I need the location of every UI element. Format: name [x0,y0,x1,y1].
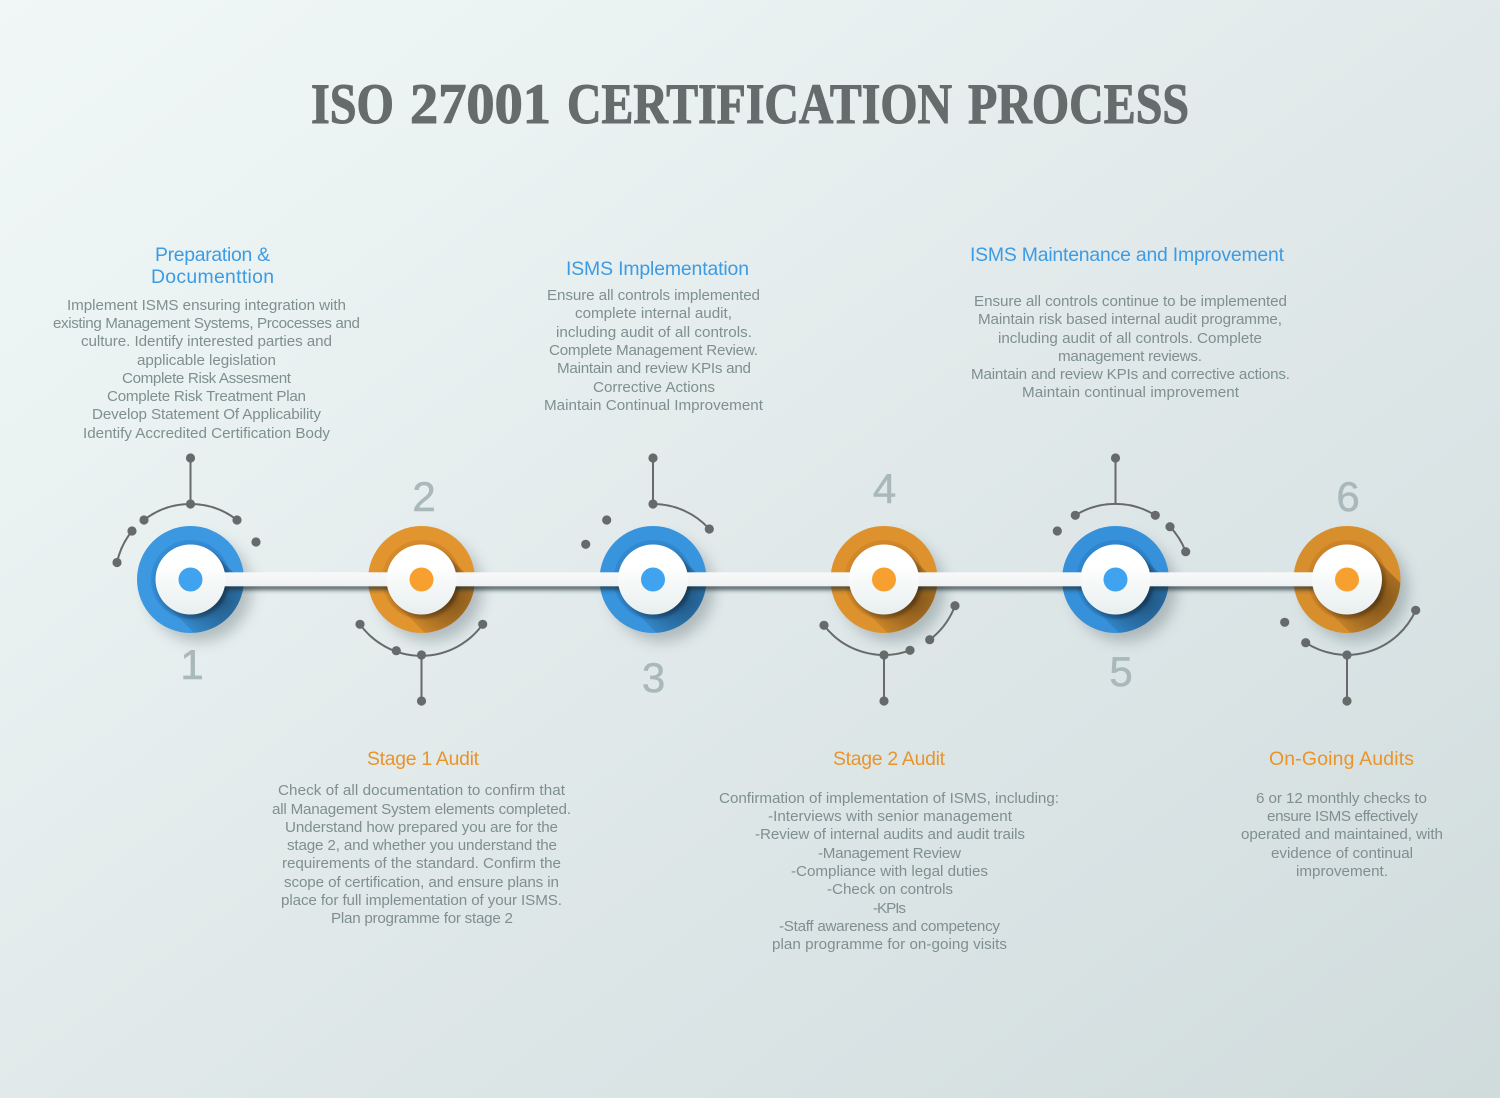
hub: step 6 [1312,544,1382,614]
text block: stage 2 audit: -Compliance with legal duties [791,863,988,880]
text block: stage 2 audit [719,790,1059,953]
text block: preparation [53,297,360,442]
panel: stage 2 audit [719,748,1059,953]
text block: ISMS implementation: Complete Management Review. [549,342,758,359]
text block: stage 1 audit [272,782,571,927]
connector: step 4 [819,601,960,706]
text block: stage 2 audit: -Staff awareness and competency [779,918,1000,935]
text block: preparation: Develop Statement Of Applicability [92,406,321,423]
text block: on-going audits [1241,790,1443,880]
text block: ISMS maintenance: Maintain and review KPIs and corrective actions. [971,366,1290,383]
connector: step 6 [1280,606,1420,706]
hub: step 4 [849,544,919,614]
text block: stage 2 audit: Confirmation of implementation of ISMS, including: [719,790,1059,807]
text block: ISMS implementation: Maintain and review KPIs and [557,360,751,377]
text block: ISMS implementation: Maintain Continual Improvement [544,397,764,414]
title: CERTIFICATION [567,73,952,136]
connector: step 1 [112,453,261,567]
heading: preparation: Preparation & [155,244,270,266]
title: 27001 [410,73,551,136]
number 3: 3 [642,654,665,701]
text block: preparation: Complete Risk Treatment Plan [107,388,306,405]
text block: preparation: Implement ISMS ensuring integration with [67,297,346,314]
text block: stage 1 audit: place for full implementation of your ISMS. [281,892,562,909]
number 6: 6 [1336,473,1360,520]
text block: stage 2 audit: -Check on controls [827,881,953,898]
text block: stage 2 audit: -KPIs [873,900,906,917]
panel: ISMS implementation [544,258,764,414]
number 1: 1 [180,641,204,688]
text block: stage 1 audit: scope of certification, and ensure plans in [284,874,559,891]
text block: on-going audits: evidence of continual [1271,845,1413,862]
text block: ISMS implementation: Corrective Actions [593,379,715,396]
connector: step 5 [1053,453,1190,556]
text block: ISMS maintenance [971,293,1290,401]
panel: ISMS maintenance and improvement [970,244,1290,401]
ring: step 3 [600,526,738,664]
text block: ISMS maintenance: Maintain continual improvement [1022,384,1240,401]
ring: step 1 [137,526,276,664]
text block: ISMS implementation [544,287,764,414]
text block: stage 2 audit: -Interviews with senior management [768,808,1013,825]
text block: on-going audits: operated and maintained, with [1241,826,1443,843]
text block: preparation: applicable legislation [137,352,276,369]
title: PROCESS [968,73,1189,136]
text block: ISMS implementation: Ensure all controls implemented [547,287,760,304]
number 2: 2 [412,473,436,520]
text block: preparation: culture. Identify interested parties and [81,333,332,350]
text block: preparation: Complete Risk Assesment [122,370,292,387]
text block: preparation: existing Management Systems, Prcocesses and [53,315,360,332]
text block: stage 2 audit: -Management Review [818,845,961,862]
hub: step 5 [1080,544,1150,614]
text block: stage 1 audit: stage 2, and whether you understand the [287,837,557,854]
heading: preparation [151,244,274,288]
text block: stage 2 audit: plan programme for on-going visits [772,936,1007,953]
panel: stage 1 audit [272,748,571,927]
text block: stage 1 audit: Understand how prepared you are for the [285,819,558,836]
panel: on-going audits [1241,748,1443,880]
text block: on-going audits: improvement. [1296,863,1388,880]
panel: preparation and documentation [53,244,360,442]
number 5: 5 [1109,648,1133,695]
heading: preparation: Documenttion [151,266,274,288]
text block: stage 1 audit: requirements of the standard. Confirm the [282,855,561,872]
connecting bar [195,572,1350,590]
text block: on-going audits: ensure ISMS effectively [1267,808,1418,825]
text block: stage 1 audit: all Management System elements completed. [272,801,571,818]
text block: ISMS implementation: complete internal audit, [575,305,732,322]
ring: step 2 [368,526,506,664]
text block: ISMS maintenance: including audit of all controls. Complete [998,330,1262,347]
text block: on-going audits: 6 or 12 monthly checks to [1256,790,1427,807]
text block: ISMS maintenance: Ensure all controls continue to be implemented [974,293,1287,310]
text block: stage 1 audit: Check of all documentation to confirm that [278,782,566,799]
heading: stage 2 audit: Stage 2 Audit [833,748,946,770]
text block: stage 2 audit: -Review of internal audits and audit trails [755,826,1025,843]
number 4: 4 [873,465,896,512]
ring: step 4 [830,526,969,664]
ring: step 6 [1294,526,1432,664]
timeline [137,526,1432,664]
text block: ISMS maintenance: Maintain risk based internal audit programme, [978,311,1282,328]
heading: ISMS implementation: ISMS Implementation [566,258,749,280]
hub: step 2 [386,544,456,614]
title [311,73,1189,136]
text block: ISMS maintenance: management reviews. [1058,348,1202,365]
heading: on-going audits: On-Going Audits [1269,748,1414,770]
connector: step 3 [581,453,714,549]
connector: step 2 [355,620,487,706]
hub: step 3 [618,544,688,614]
heading: ISMS maintenance: ISMS Maintenance and Improvement [970,244,1285,266]
heading: stage 1 audit: Stage 1 Audit [367,748,480,770]
title: ISO [311,73,394,136]
ring: step 5 [1062,526,1200,664]
hub: step 1 [156,544,226,614]
text block: stage 1 audit: Plan programme for stage 2 [331,910,513,927]
text block: ISMS implementation: including audit of all controls. [556,324,752,341]
text block: preparation: Identify Accredited Certification Body [83,425,330,442]
